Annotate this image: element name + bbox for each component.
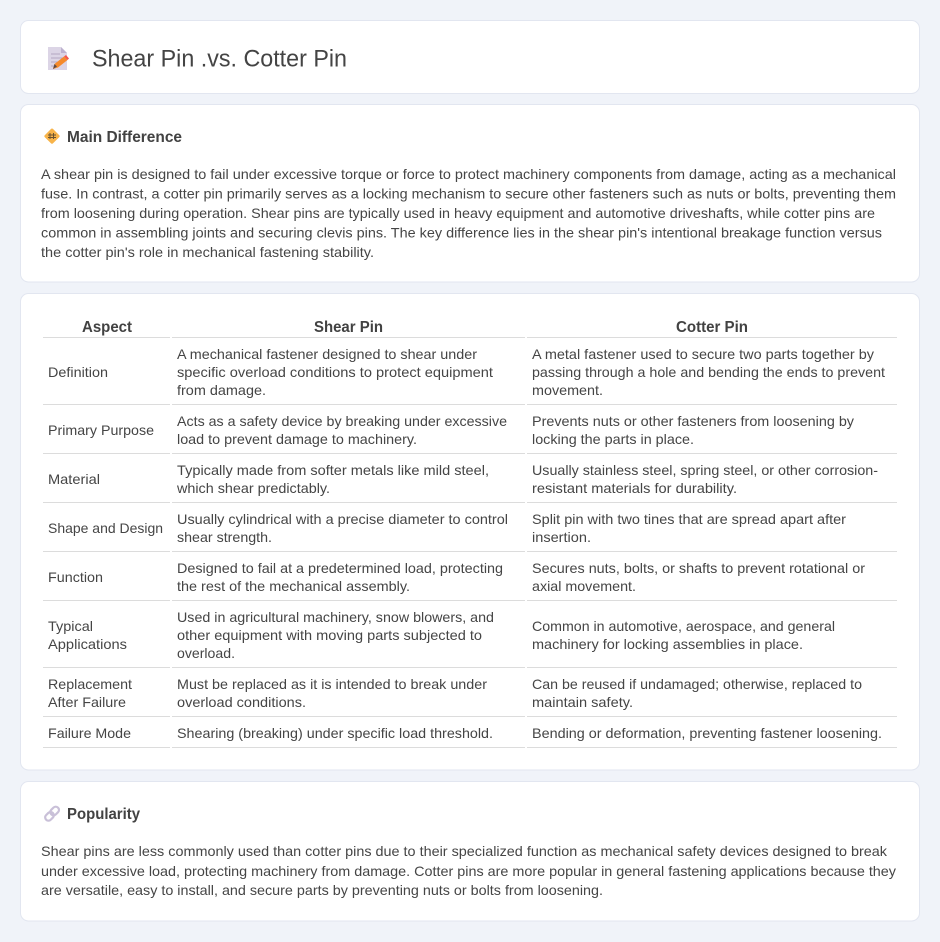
table row: function: the rest of the mechanical assembly.: [177, 578, 410, 594]
text block: main difference paragraph: fuse. In contrast, a cotter pin primarily serves as a locking mechanism to secure other fasteners such as nuts or bolts, preventing them: [41, 186, 896, 202]
table row: replacement after failure: Can be reused if undamaged; otherwise, replaced to: [532, 676, 862, 692]
table row: replacement after failure: [43, 676, 897, 717]
text block: popularity paragraph: under excessive load, protecting machinery from damage. Cotter pins are more popular in general fastening applications because they: [41, 863, 896, 879]
table row: failure mode: Failure Mode: [48, 725, 131, 741]
table row: failure mode: Shearing (breaking) under specific load threshold.: [177, 725, 493, 741]
table row: material: resistant materials for durability.: [532, 480, 737, 496]
panel: main difference: [20, 104, 920, 282]
table row: primary purpose: Acts as a safety device by breaking under excessive: [177, 413, 507, 429]
table row: definition: A metal fastener used to secure two parts together by: [532, 346, 874, 362]
table row: material: [43, 462, 897, 503]
table row: typical applications: machinery for locking assemblies in place.: [532, 636, 803, 652]
table row: shape and design: Usually cylindrical with a precise diameter to control: [177, 511, 508, 527]
table row: typical applications: [43, 609, 897, 668]
table row: shape and design: Shape and Design: [48, 520, 163, 536]
text block: main difference paragraph: A shear pin is designed to fail under excessive torque or force to protect machinery components from damage, acting as a mechanical: [41, 166, 896, 182]
table row: shape and design: shear strength.: [177, 529, 272, 545]
icon: chain link: [44, 805, 60, 822]
table row: shape and design: Split pin with two tines that are spread apart after: [532, 511, 846, 527]
table row: function: [43, 560, 897, 601]
table row: definition: passing through a hole and bending the ends to prevent: [532, 364, 885, 380]
table row: definition: specific overload conditions to protect equipment: [177, 364, 493, 380]
table row: typical applications: Applications: [48, 636, 127, 652]
panel: popularity: [20, 782, 920, 921]
text block: main difference paragraph: [41, 166, 896, 260]
panel: page header: [20, 20, 920, 94]
panel: comparison table: [20, 294, 920, 770]
table row: primary purpose: locking the parts in place.: [532, 431, 694, 447]
table row: primary purpose: Primary Purpose: [48, 422, 154, 438]
text block: main difference paragraph: common in assembling joints and securing clevis pins. The key difference lies in the shear pin's intentional breakage function versus: [41, 224, 882, 240]
table row: replacement after failure: Must be replaced as it is intended to break under: [177, 676, 487, 692]
table row: definition: [43, 346, 897, 405]
table row: shape and design: [43, 511, 897, 552]
table row: function: Secures nuts, bolts, or shafts to prevent rotational or: [532, 560, 865, 576]
table row: replacement after failure: Replacement: [48, 676, 132, 692]
table row: typical applications: overload.: [177, 645, 235, 661]
table row: failure mode: [43, 725, 897, 748]
table row: function: Function: [48, 569, 103, 585]
icon: document with pencil: [48, 47, 69, 70]
table header row: Cotter Pin: [676, 319, 748, 336]
table row: typical applications: other equipment with moving parts subjected to: [177, 627, 482, 643]
table row: typical applications: Used in agricultural machinery, snow blowers, and: [177, 609, 494, 625]
table row: replacement after failure: After Failure: [48, 694, 126, 710]
text block: popularity paragraph: are versatile, easy to install, and secure parts by preventing nuts or bolts from loosening.: [41, 882, 603, 898]
icon: diamond sign: [44, 128, 60, 144]
text block: popularity paragraph: [41, 843, 896, 898]
text block: main difference paragraph: from loosening during operation. Shear pins are typically used in heavy equipment and automotive driveshafts, while cotter pins are: [41, 205, 875, 221]
table row: shape and design: insertion.: [532, 529, 591, 545]
table row: material: Typically made from softer metals like mild steel,: [177, 462, 489, 478]
table row: material: which shear predictably.: [176, 480, 330, 496]
table row: definition: A mechanical fastener designed to shear under: [177, 346, 477, 362]
table row: material: Material: [48, 471, 100, 487]
table row: typical applications: Typical: [48, 618, 93, 634]
heading: popularity: Popularity: [67, 806, 140, 823]
table row: definition: movement.: [532, 382, 603, 398]
table header row: [43, 319, 897, 338]
title: Shear Pin .vs. Cotter Pin: [92, 46, 347, 72]
table row: material: Usually stainless steel, spring steel, or other corrosion-: [532, 462, 878, 478]
table row: typical applications: Common in automotive, aerospace, and general: [532, 618, 835, 634]
table row: function: axial movement.: [532, 578, 636, 594]
table header row: Shear Pin: [314, 319, 383, 336]
table row: failure mode: Bending or deformation, preventing fastener loosening.: [532, 725, 882, 741]
table row: definition: Definition: [48, 364, 108, 380]
table row: primary purpose: load to prevent damage to machinery.: [177, 431, 417, 447]
table row: primary purpose: Prevents nuts or other fasteners from loosening by: [532, 413, 854, 429]
table row: primary purpose: [43, 413, 897, 454]
table row: replacement after failure: overload conditions.: [177, 694, 306, 710]
table header row: Aspect: [82, 319, 133, 336]
table row: function: Designed to fail at a predetermined load, protecting: [177, 560, 503, 576]
heading: main difference: Main Difference: [67, 129, 182, 146]
text block: popularity paragraph: Shear pins are less commonly used than cotter pins due to their specialized function as mechanical safety devices designed to break: [41, 843, 888, 859]
table row: definition: from damage.: [177, 382, 266, 398]
table row: replacement after failure: maintain safety.: [532, 694, 633, 710]
text block: main difference paragraph: the cotter pin's role in mechanical fastening stability.: [41, 244, 374, 260]
